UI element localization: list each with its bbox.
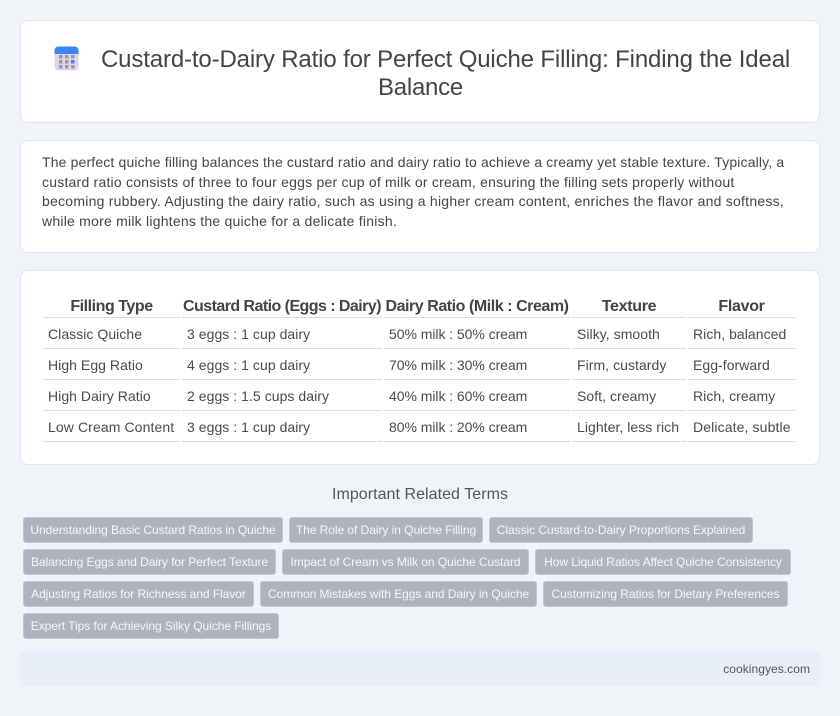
related term tags: Common Mistakes with Eggs and Dairy in Quiche (268, 587, 529, 601)
title (101, 46, 790, 101)
comparison table: High Dairy Ratio (48, 388, 151, 404)
comparison table: Dairy Ratio (Milk : Cream) (385, 298, 568, 315)
related term tags: How Liquid Ratios Affect Quiche Consistency (544, 555, 782, 569)
comparison table (43, 298, 795, 442)
comparison table: Delicate, subtle (693, 419, 791, 435)
row: High Dairy Ratio (48, 388, 776, 404)
title card (20, 20, 820, 123)
intro text: becoming rubbery. Adjusting the dairy ratio, such as using a higher cream content, enriches the flavor and softness, (42, 193, 784, 209)
icon: calendar (54, 46, 78, 70)
footer source: cookingyes.com (723, 662, 810, 676)
table panel (20, 270, 820, 465)
row: Classic Quiche (48, 326, 786, 342)
comparison table: 3 eggs : 1 cup dairy (187, 326, 310, 342)
comparison table: Rich, creamy (693, 388, 775, 404)
related terms heading: Important Related Terms (332, 486, 508, 502)
related term tags: Balancing Eggs and Dairy for Perfect Texture (31, 555, 268, 569)
intro text: custard ratio consists of three to four eggs per cup of milk or cream, ensuring the filling sets properly without (42, 174, 735, 190)
text: Balance (378, 74, 463, 101)
intro text panel (20, 140, 820, 253)
comparison table: Egg-forward (693, 357, 770, 373)
related term tags: Customizing Ratios for Dietary Preferences (552, 587, 780, 601)
comparison table: Classic Quiche (48, 326, 142, 342)
comparison table: 3 eggs : 1 cup dairy (187, 419, 310, 435)
comparison table: Lighter, less rich (577, 419, 679, 435)
row: Low Cream Content (48, 419, 791, 435)
related term tags: Classic Custard-to-Dairy Proportions Explained (497, 523, 745, 537)
text: Custard-to-Dairy Ratio for Perfect Quiche Filling: Finding the Ideal (101, 46, 790, 73)
comparison table: Low Cream Content (48, 419, 174, 435)
comparison table: Flavor (718, 298, 765, 315)
related term tags: Expert Tips for Achieving Silky Quiche Fillings (31, 619, 271, 633)
intro text: The perfect quiche filling balances the custard ratio and dairy ratio to achieve a creamy yet stable texture. Typically, a (42, 154, 784, 170)
intro text: while more milk lightens the quiche for a delicate finish. (42, 213, 397, 229)
comparison table: Silky, smooth (577, 326, 660, 342)
table header (70, 298, 765, 315)
comparison table: 80% milk : 20% cream (389, 419, 527, 435)
comparison table: Soft, creamy (577, 388, 656, 404)
related term tags: Understanding Basic Custard Ratios in Quiche (30, 523, 276, 537)
related term tags: The Role of Dairy in Quiche Filling (296, 523, 476, 537)
comparison table: 50% milk : 50% cream (389, 326, 527, 342)
comparison table: 4 eggs : 1 cup dairy (187, 357, 310, 373)
related term tags (23, 517, 791, 639)
comparison table: High Egg Ratio (48, 357, 143, 373)
related term tags: Adjusting Ratios for Richness and Flavor (31, 587, 246, 601)
comparison table: Firm, custardy (577, 357, 666, 373)
comparison table: Custard Ratio (Eggs : Dairy) (183, 298, 381, 315)
comparison table: 2 eggs : 1.5 cups dairy (187, 388, 329, 404)
comparison table: 70% milk : 30% cream (389, 357, 527, 373)
intro text (42, 154, 784, 229)
row: High Egg Ratio (48, 357, 770, 373)
comparison table: Rich, balanced (693, 326, 786, 342)
comparison table: 40% milk : 60% cream (389, 388, 527, 404)
comparison table: Texture (602, 298, 656, 315)
footer bar (20, 652, 820, 686)
comparison table: Filling Type (70, 298, 153, 315)
related term tags: Impact of Cream vs Milk on Quiche Custard (290, 555, 521, 569)
